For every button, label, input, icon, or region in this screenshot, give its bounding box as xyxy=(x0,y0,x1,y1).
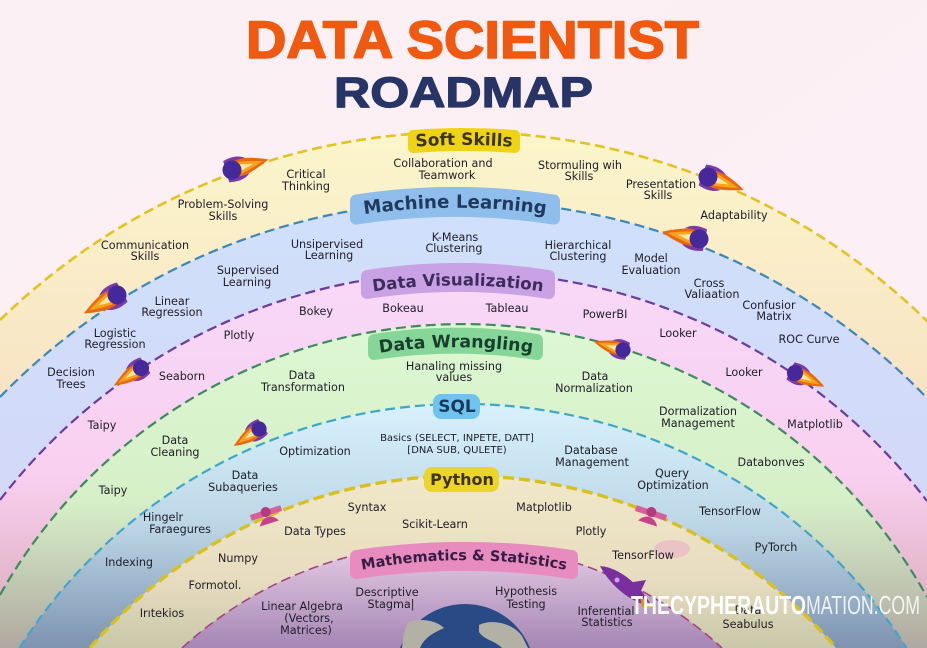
label: Plotly xyxy=(576,525,607,538)
label: Subaqueries xyxy=(208,481,278,494)
icon: satellite xyxy=(249,502,285,528)
label: Collaboration and xyxy=(393,157,493,170)
label: Basics (SELECT, INPETE, DATT] xyxy=(380,433,534,444)
dashed arc xyxy=(182,543,722,648)
icon: rocket xyxy=(228,417,271,454)
label: Numpy xyxy=(218,552,258,565)
label: Linear xyxy=(155,295,190,308)
label: Tableau xyxy=(485,302,528,315)
label: Cross xyxy=(694,277,725,290)
panel: data visualization xyxy=(0,262,927,502)
band: data visualization xyxy=(0,272,927,648)
label: Bokeau xyxy=(382,302,424,315)
label: Clustering xyxy=(549,250,607,263)
icon: rocket xyxy=(591,332,633,362)
label: TensorFlow xyxy=(611,549,674,562)
watermark: bold part: THECYPHERAUTO xyxy=(631,590,806,620)
label: Management xyxy=(555,456,629,469)
label: Query xyxy=(655,467,689,480)
label: Cleaning xyxy=(150,446,200,459)
label: ROC Curve xyxy=(779,333,840,346)
dashed arc xyxy=(0,132,927,321)
label: Learning xyxy=(223,276,271,289)
pill: mathematics and statistics: Mathematics & Statistics xyxy=(362,549,566,570)
label: Looker xyxy=(659,327,697,340)
band: python xyxy=(90,476,836,648)
pill: sql: SQL xyxy=(438,397,476,417)
label: Inferential xyxy=(578,605,634,618)
label: Hypothesis xyxy=(495,585,557,598)
label: Descriptive xyxy=(355,586,419,599)
label: TensorFlow xyxy=(698,505,761,518)
label: Skills xyxy=(644,189,673,202)
label: Normalization xyxy=(555,382,633,395)
label: Regression xyxy=(141,306,203,319)
label: Problem-Solving xyxy=(178,198,268,211)
label: [DNA SUB, QULETE) xyxy=(407,445,507,456)
band: mathematics and statistics xyxy=(182,543,722,648)
pill: data visualization: Data Visualization xyxy=(373,273,542,292)
label: Presentation xyxy=(626,178,696,191)
label: Hanaling missing xyxy=(406,360,502,373)
label: Optimization xyxy=(279,445,351,458)
title line: data scientist: DATA SCIENTIST xyxy=(246,11,699,70)
label: Faraegures xyxy=(149,523,211,536)
label: Critical xyxy=(286,168,326,181)
icon: rocket xyxy=(695,162,748,202)
label: Statistics xyxy=(581,616,633,629)
label: Trees xyxy=(55,378,86,391)
title line: roadmap: ROADMAP xyxy=(334,69,593,117)
panel: data wrangling xyxy=(0,323,927,598)
label: Adaptability xyxy=(700,209,768,222)
label: Decision xyxy=(47,366,95,379)
label: Matrix xyxy=(756,310,792,323)
icon: rocket xyxy=(783,360,829,396)
label: Formotol. xyxy=(189,579,241,592)
label: Teamwork xyxy=(418,169,476,182)
pill: sql xyxy=(433,394,480,419)
label: Seaborn xyxy=(159,370,205,383)
label: Seabulus xyxy=(722,618,774,631)
icon: satellite xyxy=(632,502,668,528)
label: Data xyxy=(582,370,608,383)
label: Skills xyxy=(131,250,160,263)
label: Evaluation xyxy=(621,264,681,277)
pill: data wrangling: Data Wrangling xyxy=(380,334,532,356)
label: Clustering xyxy=(425,242,483,255)
pill: machine learning: Machine Learning xyxy=(364,194,546,218)
concentric colour bands xyxy=(0,132,927,648)
label: Transformation xyxy=(260,381,345,394)
label: Database xyxy=(564,444,618,457)
dashed arc xyxy=(0,272,927,501)
label: Plotly xyxy=(224,329,255,342)
label: Learning xyxy=(305,249,353,262)
label: Matrices) xyxy=(280,624,332,637)
label: Logistic xyxy=(94,327,136,340)
label: Data xyxy=(162,434,188,447)
label: Hierarchical xyxy=(545,239,611,252)
label: Hingelr xyxy=(143,511,184,524)
label: Testing xyxy=(505,598,546,611)
panel: soft skills xyxy=(0,128,927,322)
label: PyTorch xyxy=(755,541,797,554)
icon: rocket xyxy=(78,280,131,324)
label: Databonves xyxy=(737,456,805,469)
label: Thinking xyxy=(281,180,330,193)
icon: earth globe xyxy=(400,604,530,648)
label: Unsipervised xyxy=(291,238,363,251)
label: Indexing xyxy=(105,556,153,569)
dashed arc xyxy=(0,324,927,597)
label: Taipy xyxy=(87,419,117,432)
dashed arc xyxy=(90,476,836,648)
label: Valiaation xyxy=(684,288,740,301)
label: Bokey xyxy=(299,305,333,318)
panel: python xyxy=(90,467,836,648)
label: Matplotlib xyxy=(787,418,843,431)
icon: purple rocket xyxy=(600,566,654,607)
label: Data xyxy=(232,469,258,482)
label: Stormuling wih xyxy=(538,159,622,172)
pill: data visualization xyxy=(361,262,555,299)
label: Supervised xyxy=(217,264,279,277)
label: Taipy xyxy=(98,484,128,497)
band: sql xyxy=(20,404,906,648)
label: Scikit-Learn xyxy=(402,518,468,531)
label: Data Types xyxy=(284,525,346,538)
dashed arc xyxy=(20,404,906,648)
pink smudge near tensorflow xyxy=(654,540,690,558)
label: Irıtekios xyxy=(140,607,184,620)
label: Matplotlib xyxy=(516,501,572,514)
label: Management xyxy=(661,417,735,430)
icon: rocket xyxy=(219,148,272,184)
pill: mathematics and statistics xyxy=(350,542,578,579)
label: Regression xyxy=(84,338,146,351)
label: Skills xyxy=(565,170,594,183)
panel: mathematics and statistics xyxy=(182,542,774,648)
label: Stagma| xyxy=(368,598,414,611)
pill: python xyxy=(424,467,499,492)
band: data wrangling xyxy=(0,324,927,648)
label: Linear Algebra xyxy=(261,600,343,613)
label: Syntax xyxy=(348,501,387,514)
label: (Vectors, xyxy=(284,612,334,625)
label: PowerBI xyxy=(583,308,627,321)
label: Confusior xyxy=(742,299,796,312)
label: Dormalization xyxy=(659,405,737,418)
label: Communication xyxy=(101,239,189,252)
dashed arc xyxy=(0,201,927,398)
label: K-Means xyxy=(432,231,478,244)
panel: sql xyxy=(20,394,906,648)
label: Data xyxy=(289,369,315,382)
icon: rocket xyxy=(659,220,711,253)
icon: rocket xyxy=(108,355,153,394)
label: Model xyxy=(634,252,668,265)
pill: machine learning xyxy=(350,186,560,225)
label: Optimization xyxy=(637,479,709,492)
label: Skills xyxy=(209,210,238,223)
label: values xyxy=(436,371,472,384)
title xyxy=(246,11,699,117)
band: machine learning xyxy=(0,201,927,648)
label: Data xyxy=(735,604,761,617)
pill: soft skills: Soft Skills xyxy=(416,132,512,147)
band: soft skills xyxy=(0,132,927,648)
label: Looker xyxy=(725,366,763,379)
panel: machine learning xyxy=(0,186,925,398)
pill: python: Python xyxy=(430,470,494,489)
watermark xyxy=(631,590,920,620)
